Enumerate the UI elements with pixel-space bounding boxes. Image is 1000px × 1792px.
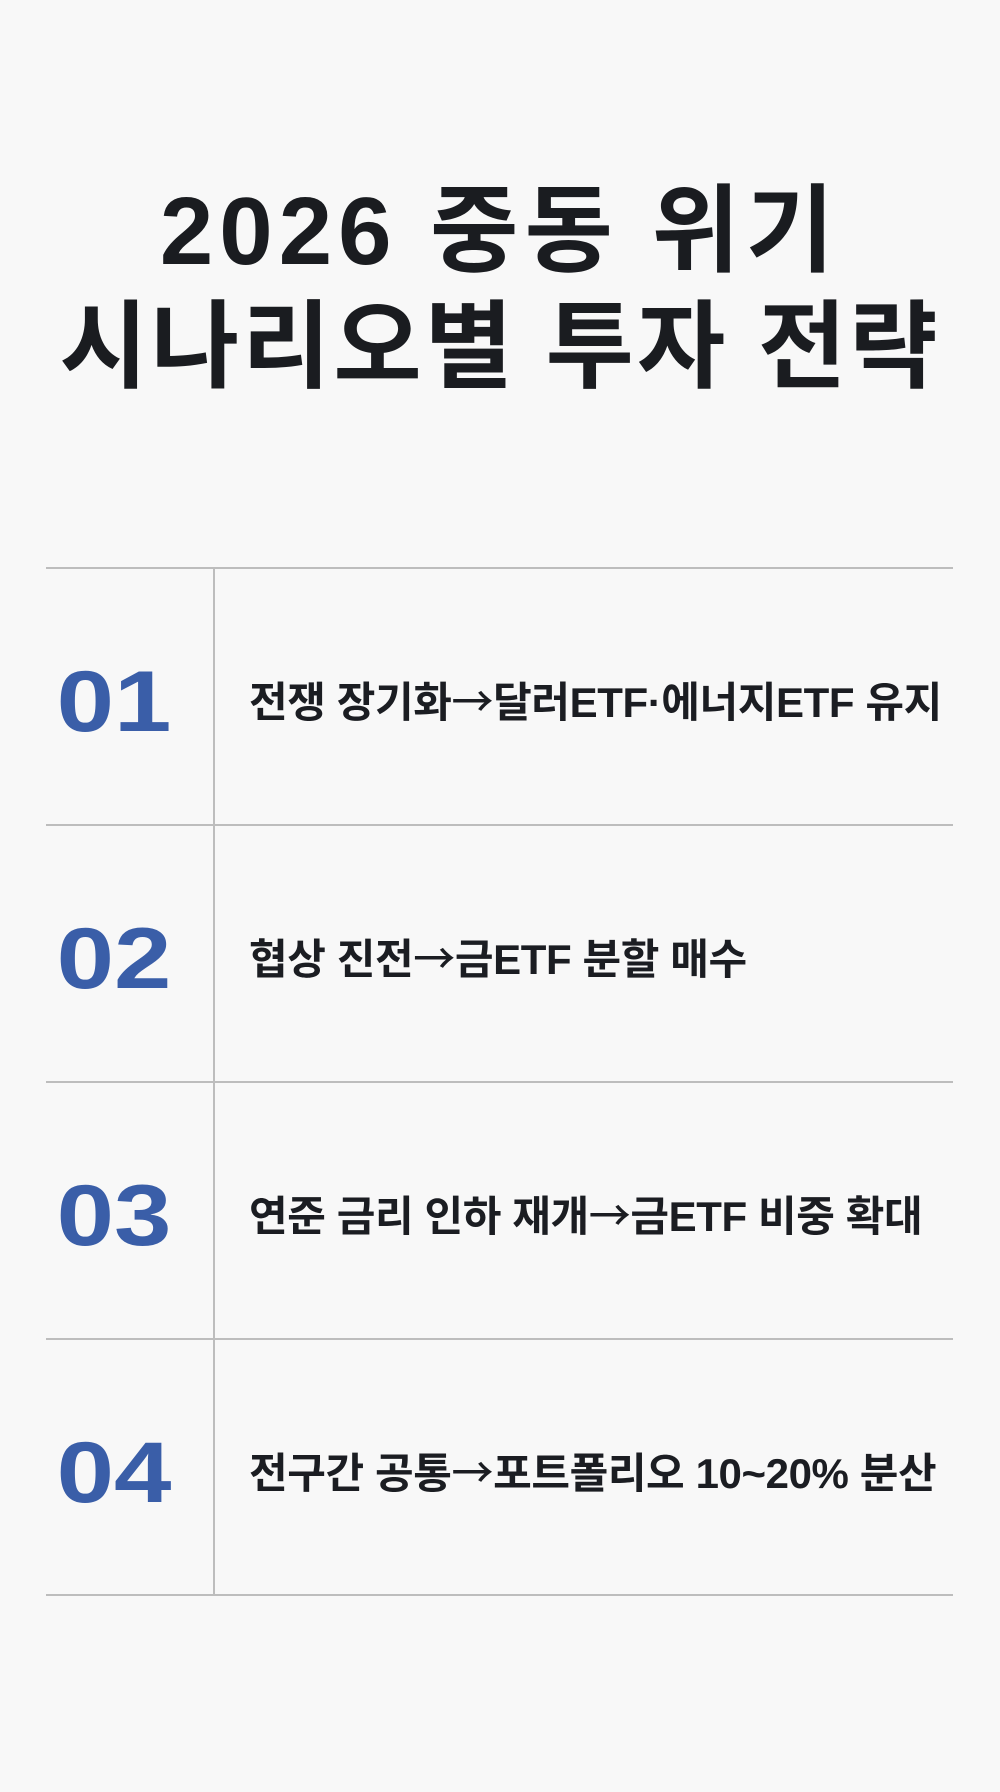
table: scenario strategies bbox=[46, 567, 953, 1596]
number 03: 03 bbox=[57, 1168, 171, 1264]
number 04: 04 bbox=[57, 1425, 171, 1521]
row 02 bbox=[57, 911, 747, 1007]
title: 시나리오별 투자 전략 bbox=[59, 294, 941, 401]
number 02: 02 bbox=[57, 911, 171, 1007]
title bbox=[59, 178, 941, 401]
text 02: 협상 진전→금ETF 분할 매수 bbox=[249, 926, 747, 987]
text 03: 연준 금리 인하 재개→금ETF 비중 확대 bbox=[249, 1183, 922, 1244]
title: 2026 중동 위기 bbox=[160, 178, 840, 285]
row 03 bbox=[57, 1168, 922, 1264]
text 01: 전쟁 장기화→달러ETF·에너지ETF 유지 bbox=[249, 669, 942, 730]
row 04 bbox=[57, 1425, 936, 1521]
number 01: 01 bbox=[57, 654, 171, 750]
text 04: 전구간 공통→포트폴리오 10~20% 분산 bbox=[249, 1440, 936, 1501]
row 01 bbox=[57, 654, 942, 750]
